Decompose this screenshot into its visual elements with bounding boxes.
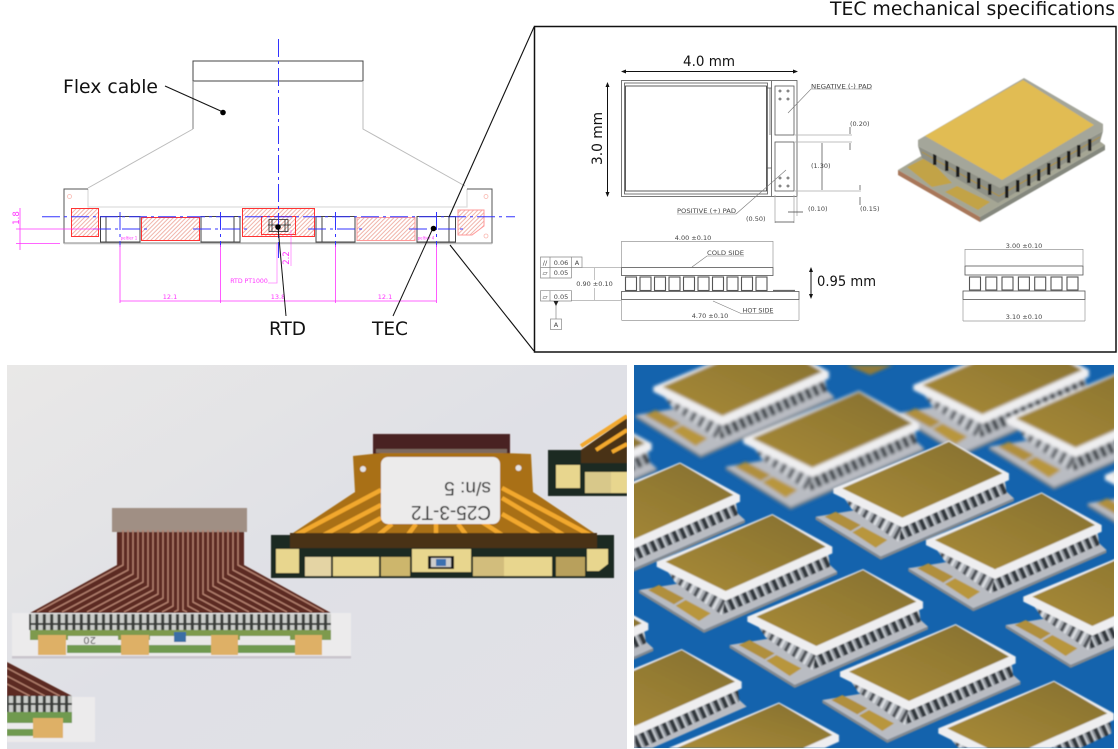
module cut by bottom edge, left bbox=[548, 649, 747, 748]
orange flex body bbox=[290, 453, 597, 535]
dimension labels: RTD PT1000 bbox=[230, 278, 268, 285]
zoom lines to specification panel bbox=[449, 27, 534, 351]
module cut by bottom edge, right bbox=[938, 681, 1114, 748]
green-black board bbox=[271, 535, 614, 578]
callout: RTD bbox=[269, 224, 306, 340]
red hatched pads bbox=[72, 208, 484, 240]
dimension labels bbox=[12, 211, 435, 301]
dimension labels: 2.2 bbox=[282, 251, 292, 265]
green board strip bbox=[30, 630, 331, 640]
isometric TEC render bbox=[898, 78, 1105, 222]
tolerance frames: ▱ bbox=[542, 293, 548, 301]
upper orange flex assembly bbox=[271, 434, 614, 578]
dimension labels: 12.1 bbox=[163, 293, 177, 301]
dimension: 0.95 mm bbox=[809, 267, 876, 299]
dimension: 3.0 mm: 3.0 mm bbox=[590, 112, 606, 165]
partial flex, top right bbox=[548, 416, 627, 496]
callout: TEC: TEC bbox=[371, 318, 408, 340]
dimension labels: peltier 1 bbox=[121, 236, 138, 240]
callout: flex cable: Flex cable bbox=[63, 76, 158, 98]
top view drawing: (0.10) bbox=[808, 205, 828, 213]
photo: flex cables with TECs bbox=[7, 365, 627, 749]
RTD footprint bbox=[268, 220, 291, 232]
connector strip bbox=[373, 434, 510, 455]
panel: TEC mechanical specifications bbox=[534, 26, 1116, 352]
side view: long edge: HOT SIDE bbox=[742, 306, 774, 314]
side view: long edge: 4.00 ±0.10 bbox=[675, 234, 711, 242]
dimension: 4.0 mm bbox=[621, 54, 798, 74]
flex traces bbox=[37, 530, 324, 612]
dimension labels: 1.8 bbox=[12, 211, 22, 225]
top view drawing: (1.30) bbox=[811, 162, 831, 170]
label: s/n sticker bbox=[381, 457, 500, 524]
tolerance frames bbox=[540, 257, 582, 330]
tolerance frames: A bbox=[575, 259, 580, 267]
dimension: 0.95 mm: 0.95 mm bbox=[817, 274, 876, 290]
top view drawing: (0.50) bbox=[746, 215, 766, 223]
top view drawing: POSITIVE (+) PAD bbox=[677, 207, 736, 215]
dimension labels: 13.8 bbox=[271, 293, 285, 301]
partial flex, bottom left bbox=[7, 662, 95, 742]
blue centre lines bbox=[42, 39, 515, 258]
module cut by bottom edge, centre bbox=[668, 702, 839, 748]
callout: flex cable bbox=[63, 76, 226, 115]
dimension: 4.0 mm: 4.0 mm bbox=[683, 54, 735, 70]
side view: long edge bbox=[571, 234, 799, 320]
lower brown flex assembly: 20 bbox=[83, 634, 96, 645]
magenta dimensions bbox=[16, 208, 436, 303]
far row of modules bbox=[634, 365, 1114, 526]
side view: short edge: 3.00 ±0.10 bbox=[1006, 242, 1042, 250]
top view drawing: (0.15) bbox=[860, 205, 880, 213]
near rows of modules bbox=[634, 440, 1114, 748]
TEC footprints bbox=[100, 216, 456, 242]
callout: TEC bbox=[371, 226, 436, 340]
tolerance frames: 0.05 bbox=[554, 293, 568, 301]
top view drawing: (0.20) bbox=[850, 120, 870, 128]
RTD sensor bbox=[428, 556, 454, 569]
tolerance frames: ▱ bbox=[542, 269, 548, 277]
tolerance frames: // bbox=[543, 259, 548, 267]
tolerance frames: 0.06 bbox=[554, 259, 568, 267]
mounting holes bbox=[68, 194, 488, 238]
wire bond contacts bbox=[29, 614, 331, 630]
gold TEC tops bbox=[38, 635, 322, 655]
side view: long edge: 0.90 ±0.10 bbox=[576, 280, 613, 288]
side view: short edge: 3.10 ±0.10 bbox=[1006, 313, 1042, 321]
side view: long edge: COLD SIDE bbox=[707, 249, 744, 257]
callout: RTD: RTD bbox=[269, 318, 306, 340]
label: s/n sticker: s/n: 5 bbox=[444, 477, 491, 498]
top view drawing bbox=[622, 80, 880, 223]
top view drawing: NEGATIVE (-) PAD bbox=[811, 82, 872, 90]
gold pads bbox=[276, 549, 608, 576]
side view: short edge bbox=[963, 242, 1085, 321]
photo: array of TEC modules on blue bbox=[634, 365, 1114, 748]
dimension: 3.0 mm bbox=[590, 82, 610, 197]
lower brown flex assembly bbox=[12, 508, 351, 658]
flex cable technical drawing bbox=[12, 39, 515, 303]
dimension labels: peltier 4 bbox=[418, 236, 435, 240]
dimension labels: 12.1 bbox=[378, 293, 392, 301]
tolerance frames: A bbox=[554, 321, 559, 329]
side view: long edge: 4.70 ±0.10 bbox=[692, 312, 728, 320]
flex cable outline bbox=[64, 61, 492, 244]
label: s/n sticker: C25-3-T2 bbox=[411, 501, 491, 523]
tolerance frames: 0.05 bbox=[554, 269, 568, 277]
